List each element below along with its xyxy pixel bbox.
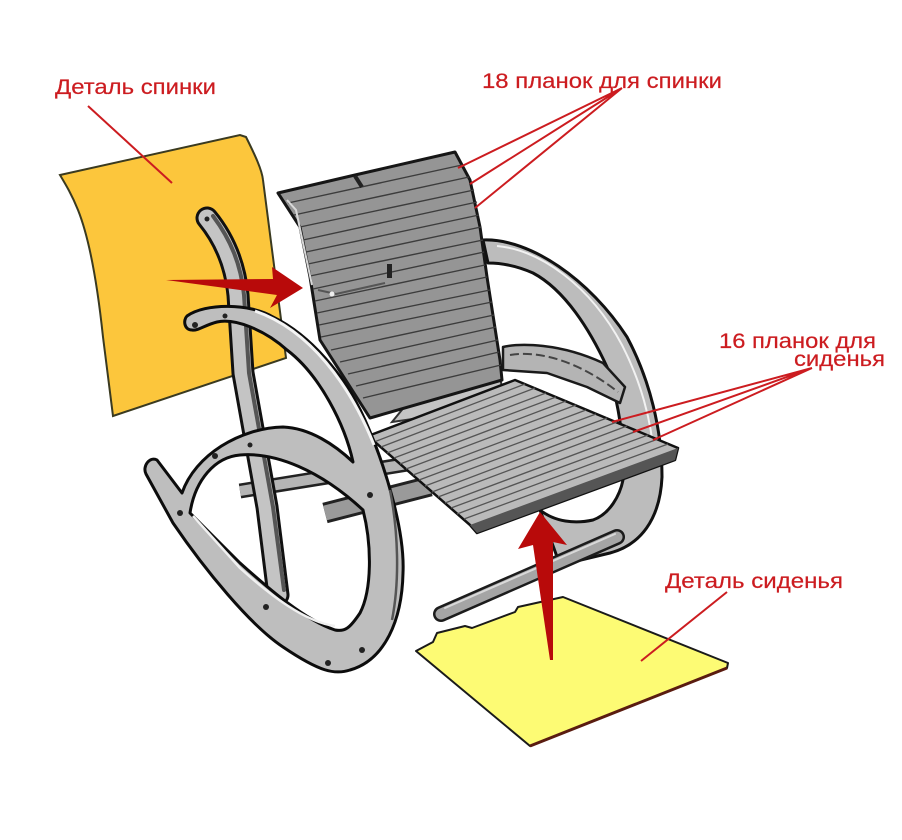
arrow: back panel to chair xyxy=(166,267,303,308)
chair left rocker frame xyxy=(145,306,403,672)
back slats xyxy=(278,152,502,418)
right arm rail xyxy=(503,345,625,403)
label: seat slats second line: сиденья xyxy=(794,348,885,371)
side post xyxy=(204,216,284,595)
bar xyxy=(441,534,617,614)
panel: back detail xyxy=(60,135,286,416)
slot mark xyxy=(387,264,392,278)
label: back detail: Деталь спинки xyxy=(55,76,216,99)
rivets xyxy=(177,314,373,666)
arrow: seat panel to chair xyxy=(518,512,567,660)
label: back slats: 18 планок для спинки xyxy=(482,70,722,93)
struts under backrest xyxy=(392,378,505,422)
label: seat slats: 16 планок для xyxy=(719,330,876,353)
cross bars behind the seat xyxy=(240,462,430,513)
label: seat detail: Деталь сиденья xyxy=(665,570,843,593)
panel: seat detail xyxy=(416,597,728,746)
leader lines xyxy=(88,88,812,661)
chair right rocker frame xyxy=(483,240,662,565)
seat slats xyxy=(368,380,678,533)
